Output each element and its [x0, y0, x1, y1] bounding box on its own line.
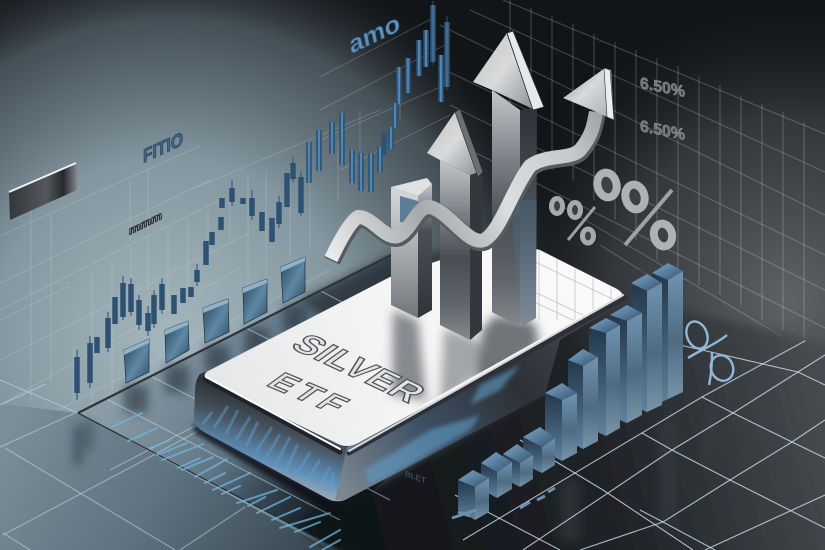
- floor: right panel: [300, 300, 825, 550]
- bar 7: [589, 318, 620, 436]
- label: small tag: mmm: [129, 209, 162, 238]
- square 5: [281, 257, 305, 303]
- blue reflection spikes: [203, 406, 334, 495]
- bar 10: [652, 263, 683, 407]
- label: rate 1: 6.50%: [640, 74, 685, 101]
- arrow head: [563, 68, 614, 120]
- panel: silver bar: [193, 240, 626, 512]
- bar 4: [523, 427, 555, 473]
- floor edge lines: [78, 253, 395, 550]
- arrow: second column: [427, 109, 483, 340]
- silver bar shadow: [193, 423, 345, 512]
- icon: large percent rings: [595, 171, 675, 248]
- arrow head: [473, 33, 533, 109]
- bar 1: [458, 470, 489, 520]
- bar 6: [568, 349, 598, 449]
- bar 8: [610, 305, 642, 423]
- floor: left panel: [0, 400, 350, 550]
- column: first: [391, 178, 432, 318]
- blue square bars: [124, 257, 305, 383]
- bar rim highlight: [205, 295, 625, 453]
- bar top reflections: [385, 250, 613, 408]
- mini blue bar chart on floor: [112, 413, 340, 550]
- silver bar left side: [194, 372, 353, 501]
- right wall grid: [440, 0, 825, 343]
- silver bar top face: [204, 240, 623, 446]
- bar 5: [545, 383, 577, 461]
- arrow: third column: [473, 31, 544, 327]
- label: blue tag middle: FITIO: [143, 128, 183, 168]
- label: small floor tag: BLET: [405, 469, 426, 485]
- candlestick chart: [77, 1, 447, 400]
- label: ETF: ETF: [259, 368, 356, 418]
- square 4: [243, 279, 267, 324]
- floor: centre panel: [78, 253, 560, 550]
- column front: [492, 90, 520, 327]
- floor grid lines: [0, 280, 825, 550]
- square 3: [203, 299, 229, 343]
- floor reflections: [74, 305, 307, 465]
- icon: small blue pieces on floor: [452, 488, 555, 518]
- column side: [520, 107, 537, 327]
- bar 2: [481, 452, 512, 498]
- square 2: [165, 321, 189, 363]
- blue bar chart: [458, 263, 683, 520]
- icon: small percent rings: [552, 198, 595, 243]
- blue reflections on right side: [365, 365, 520, 485]
- icon: glass percent sign: [682, 318, 737, 385]
- arrow: wavy silver trend line: [331, 68, 614, 261]
- floor: dark patch behind bar: [300, 250, 500, 340]
- label: SILVER: SILVER: [283, 329, 435, 408]
- silver bar right side: [335, 293, 626, 500]
- square 1: [124, 339, 149, 383]
- bar 9: [631, 274, 662, 412]
- bar 3: [503, 444, 533, 487]
- left wall grid: [0, 18, 450, 480]
- arrow head rim: [507, 31, 544, 110]
- plaque: [9, 163, 77, 220]
- label: rate 2: 6.50%: [640, 117, 685, 144]
- label: blue tag top: amo: [347, 9, 402, 60]
